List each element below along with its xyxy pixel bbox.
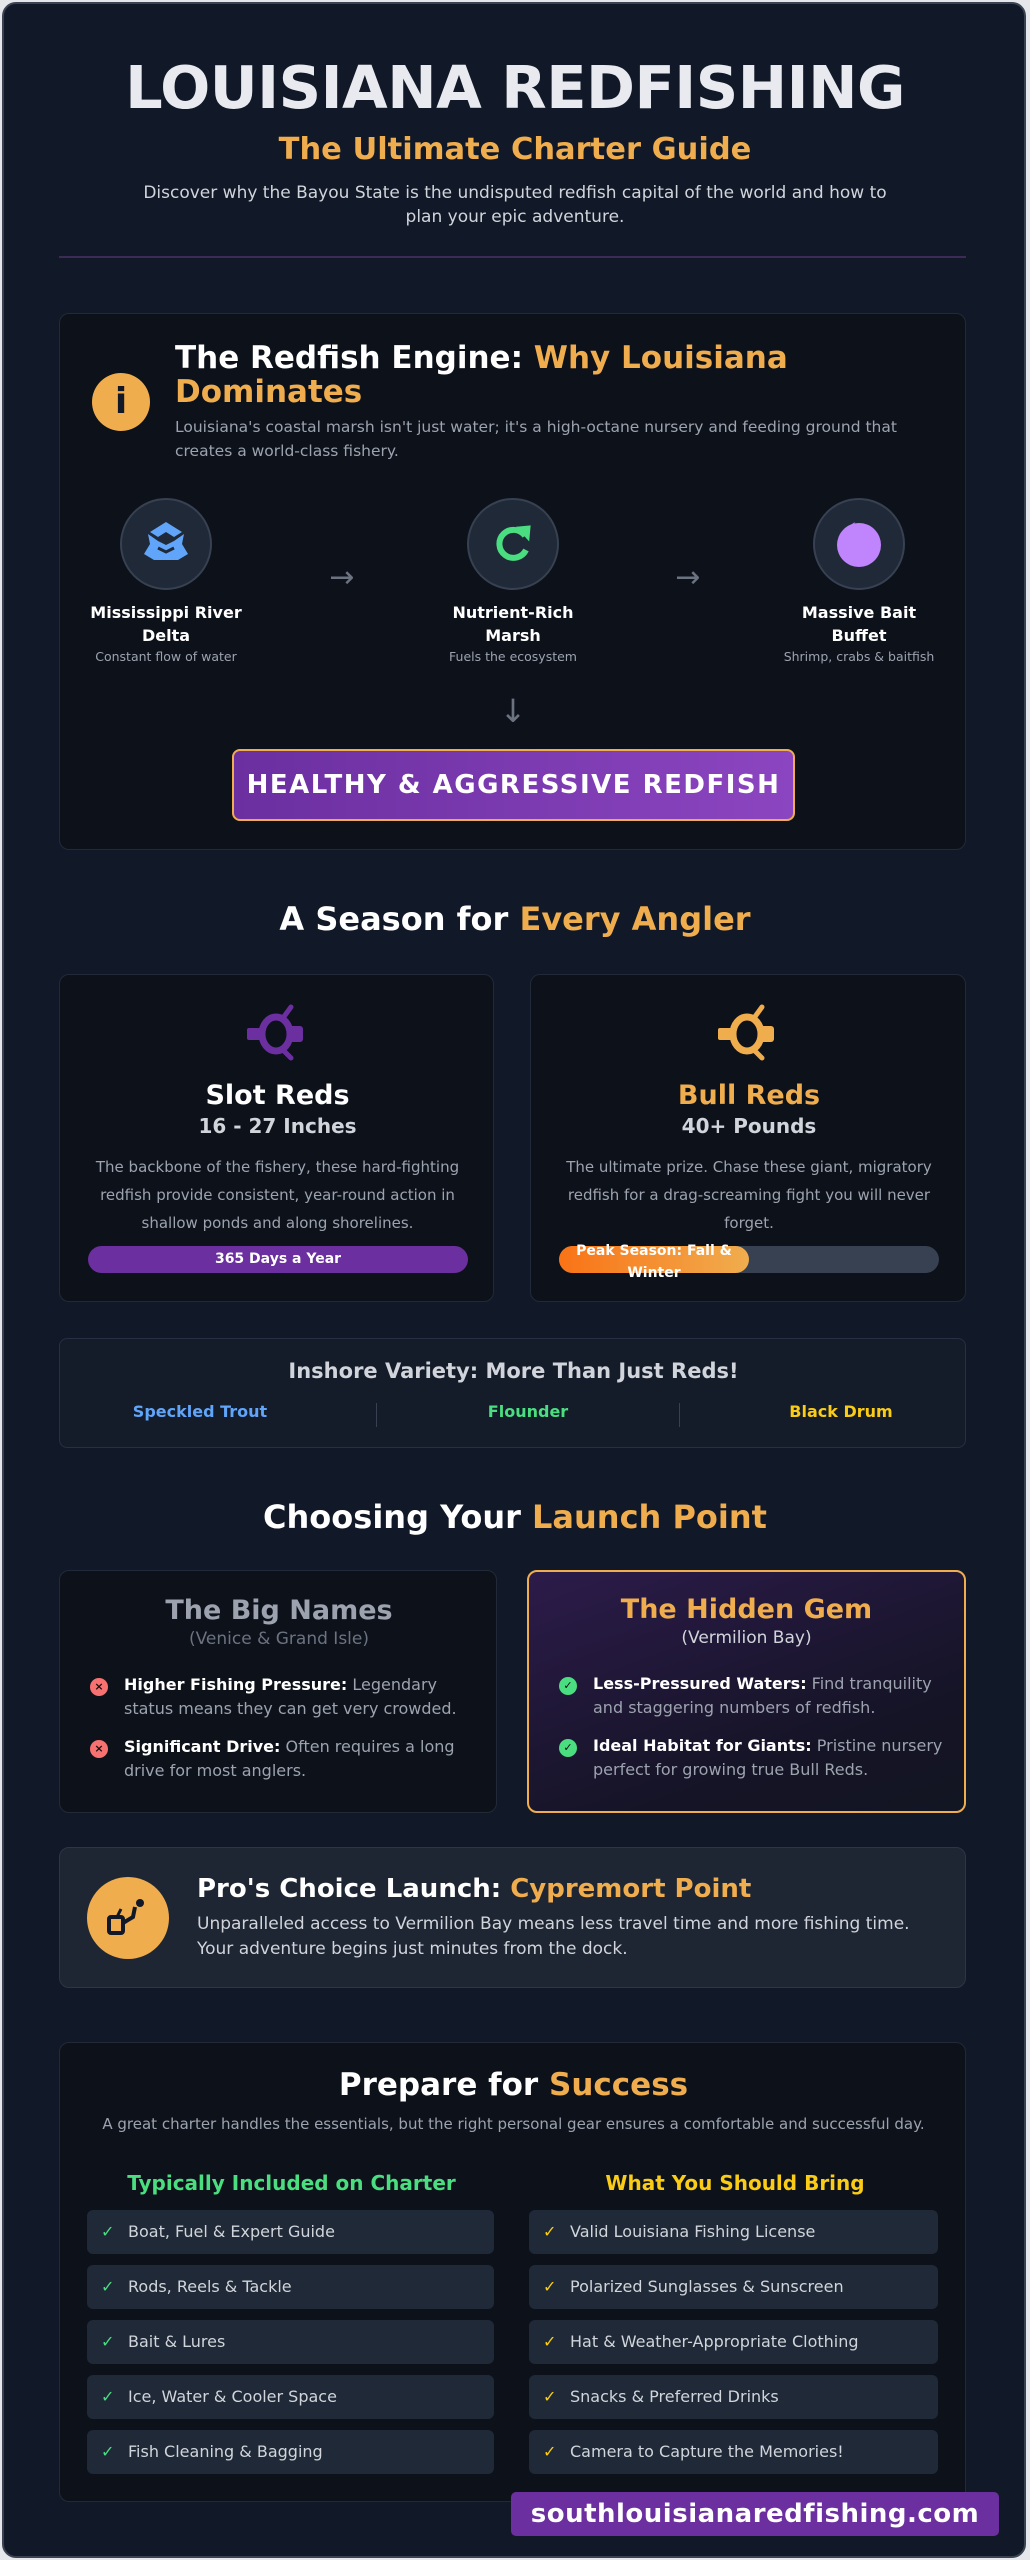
title: Bull Reds (678, 1080, 820, 1111)
panel: big names: (Venice & Grand Isle) (189, 1629, 369, 1649)
list: included: Boat, Fuel & Expert Guide (128, 2222, 335, 2241)
icon: info (92, 373, 150, 431)
panel: prepare for success: Typically Included on Charter (127, 2171, 456, 2195)
panel: big names (59, 1570, 497, 1813)
result box: HEALTHY & AGGRESSIVE REDFISH (247, 770, 780, 800)
bar (88, 1246, 468, 1273)
list: included: ✓ (101, 2332, 114, 2351)
list: included: Fish Cleaning & Bagging (128, 2442, 323, 2461)
panel: bull reds: 40+ Pounds (682, 1114, 816, 1138)
step: bait (784, 498, 934, 664)
panel: inshore variety: Inshore Variety: More Than Just Reds! (288, 1359, 739, 1383)
con item: Significant Drive: Often requires a long drive for most anglers. (124, 1737, 455, 1780)
step: marsh: Fuels the ecosystem (449, 649, 577, 664)
list: bring: Valid Louisiana Fishing License (570, 2222, 815, 2241)
list: bring: ✓ (543, 2277, 556, 2296)
panel: inshore variety: Black Drum (789, 1402, 893, 1421)
step: delta (90, 498, 242, 664)
list: included: ✓ (101, 2387, 114, 2406)
panel: pro's choice (59, 1847, 966, 1988)
icon: hook (718, 1004, 774, 1060)
result box (232, 749, 795, 821)
panel: prepare for success: What You Should Bring (605, 2171, 865, 2195)
panel: redfish engine (59, 313, 966, 850)
list: bring (529, 2210, 938, 2474)
arrow: → (675, 560, 701, 595)
description: The ultimate prize. Chase these giant, migratory redfish for a drag-screaming fight you will never forget. (566, 1158, 932, 1232)
icon: bait (813, 498, 905, 590)
con item: Higher Fishing Pressure: Legendary status means they can get very crowded. (124, 1675, 457, 1718)
panel: inshore variety: Flounder (488, 1402, 568, 1421)
list: bring: Snacks & Preferred Drinks (570, 2387, 779, 2406)
list: included: ✓ (101, 2442, 114, 2461)
panel: bull reds (530, 974, 966, 1302)
list: included: ✓ (101, 2222, 114, 2241)
step: delta: Mississippi River Delta (90, 603, 242, 645)
list: included: Bait & Lures (128, 2332, 225, 2351)
icon: launch (87, 1877, 169, 1959)
intro text: Discover why the Bayou State is the undisputed redfish capital of the world and how to plan your epic adventure. (143, 183, 887, 227)
panel: prepare for success: A great charter handles the essentials, but the right personal gear ensures a comfortable and successful day. (102, 2115, 925, 2133)
con item: × (94, 1680, 104, 1693)
panel: inshore variety: Speckled Trout (133, 1402, 267, 1421)
list: included: Rods, Reels & Tackle (128, 2277, 292, 2296)
list: bring: ✓ (543, 2442, 556, 2461)
icon: info: i (115, 381, 127, 422)
panel: slot reds (59, 974, 494, 1302)
list: bring: Hat & Weather-Appropriate Clothing (570, 2332, 859, 2351)
panel: pro's choice: Unparalleled access to Vermilion Bay means less travel time and more fishing time. Your adventure begins just minutes from the dock. (197, 1914, 910, 1959)
heading: The Redfish Engine: Why Louisiana Dominates (175, 340, 788, 410)
pro item: ✓ (563, 1679, 573, 1692)
step: marsh: Nutrient-Rich Marsh (452, 603, 574, 645)
panel: pro's choice: Pro's Choice Launch: Cypremort Point (197, 1874, 751, 1904)
bar: Peak Season: Fall & (576, 1243, 732, 1259)
panel: hidden gem: The Hidden Gem (621, 1594, 872, 1625)
panel: slot reds: 16 - 27 Inches (198, 1114, 357, 1138)
pro item: Less-Pressured Waters: Find tranquility and staggering numbers of redfish. (593, 1674, 932, 1717)
list: bring: Polarized Sunglasses & Sunscreen (570, 2277, 844, 2296)
list: bring: ✓ (543, 2332, 556, 2351)
subtitle: The Ultimate Charter Guide (279, 132, 751, 167)
step: delta: Constant flow of water (95, 649, 237, 664)
footer badge (511, 2492, 999, 2536)
bar: 365 Days a Year (215, 1251, 341, 1267)
list: bring: ✓ (543, 2222, 556, 2241)
step: marsh (449, 498, 577, 664)
heading: launch point: Choosing Your Launch Point (263, 1498, 767, 1536)
title: Slot Reds (205, 1080, 350, 1111)
list: bring: Camera to Capture the Memories! (570, 2442, 844, 2461)
heading: season: A Season for Every Angler (279, 900, 751, 938)
panel: hidden gem (527, 1570, 966, 1813)
panel: inshore variety (59, 1338, 966, 1448)
footer badge: southlouisianaredfishing.com (531, 2499, 979, 2529)
list: included: Ice, Water & Cooler Space (128, 2387, 337, 2406)
list: bring: ✓ (543, 2387, 556, 2406)
icon: delta (120, 498, 212, 590)
paragraph: Louisiana's coastal marsh isn't just water; it's a high-octane nursery and feeding ground that creates a world-class fishery. (175, 418, 897, 460)
arrow: → (329, 560, 355, 595)
panel: prepare for success (59, 2042, 966, 2502)
arrow down: ↓ (500, 692, 526, 730)
pro item: ✓ (563, 1741, 573, 1754)
panel: prepare for success: Prepare for Success (339, 2067, 688, 2103)
description: The backbone of the fishery, these hard-fighting redfish provide consistent, year-round action in shallow ponds and along shorelines. (96, 1158, 459, 1232)
list: included (87, 2210, 494, 2474)
bar: Winter (627, 1265, 681, 1281)
icon: hook (247, 1004, 303, 1060)
pro item: Ideal Habitat for Giants: Pristine nursery perfect for growing true Bull Reds. (593, 1736, 942, 1779)
icon: cycle (467, 498, 559, 590)
bar (559, 1246, 939, 1273)
panel: hidden gem: (Vermilion Bay) (681, 1628, 812, 1648)
con item: × (94, 1742, 104, 1755)
list: included: ✓ (101, 2277, 114, 2296)
panel: big names: The Big Names (165, 1595, 393, 1626)
step: bait: Massive Bait Buffet (802, 603, 916, 645)
title: LOUISIANA REDFISHING (125, 53, 905, 122)
step: bait: Shrimp, crabs & baitfish (784, 649, 934, 664)
